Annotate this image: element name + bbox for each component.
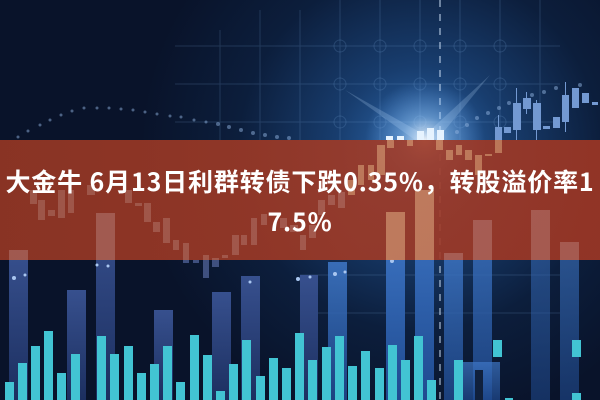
- dotted curve: [16, 83, 582, 140]
- cyan bars: [5, 331, 581, 400]
- dashed vertical line: [439, 0, 441, 400]
- upper right candles: [495, 82, 598, 140]
- glow: [365, 80, 485, 200]
- title: 大金牛 6月13日利群转债下跌0.35%，转股溢价率1: [5, 163, 595, 199]
- grid lines and nodes: [175, 0, 560, 313]
- lower dots: [12, 259, 394, 284]
- dim candles below band: [183, 260, 219, 278]
- title band: [0, 140, 600, 260]
- title: [5, 163, 595, 239]
- title: 7.5%: [267, 203, 333, 239]
- background blue bars: [9, 213, 318, 400]
